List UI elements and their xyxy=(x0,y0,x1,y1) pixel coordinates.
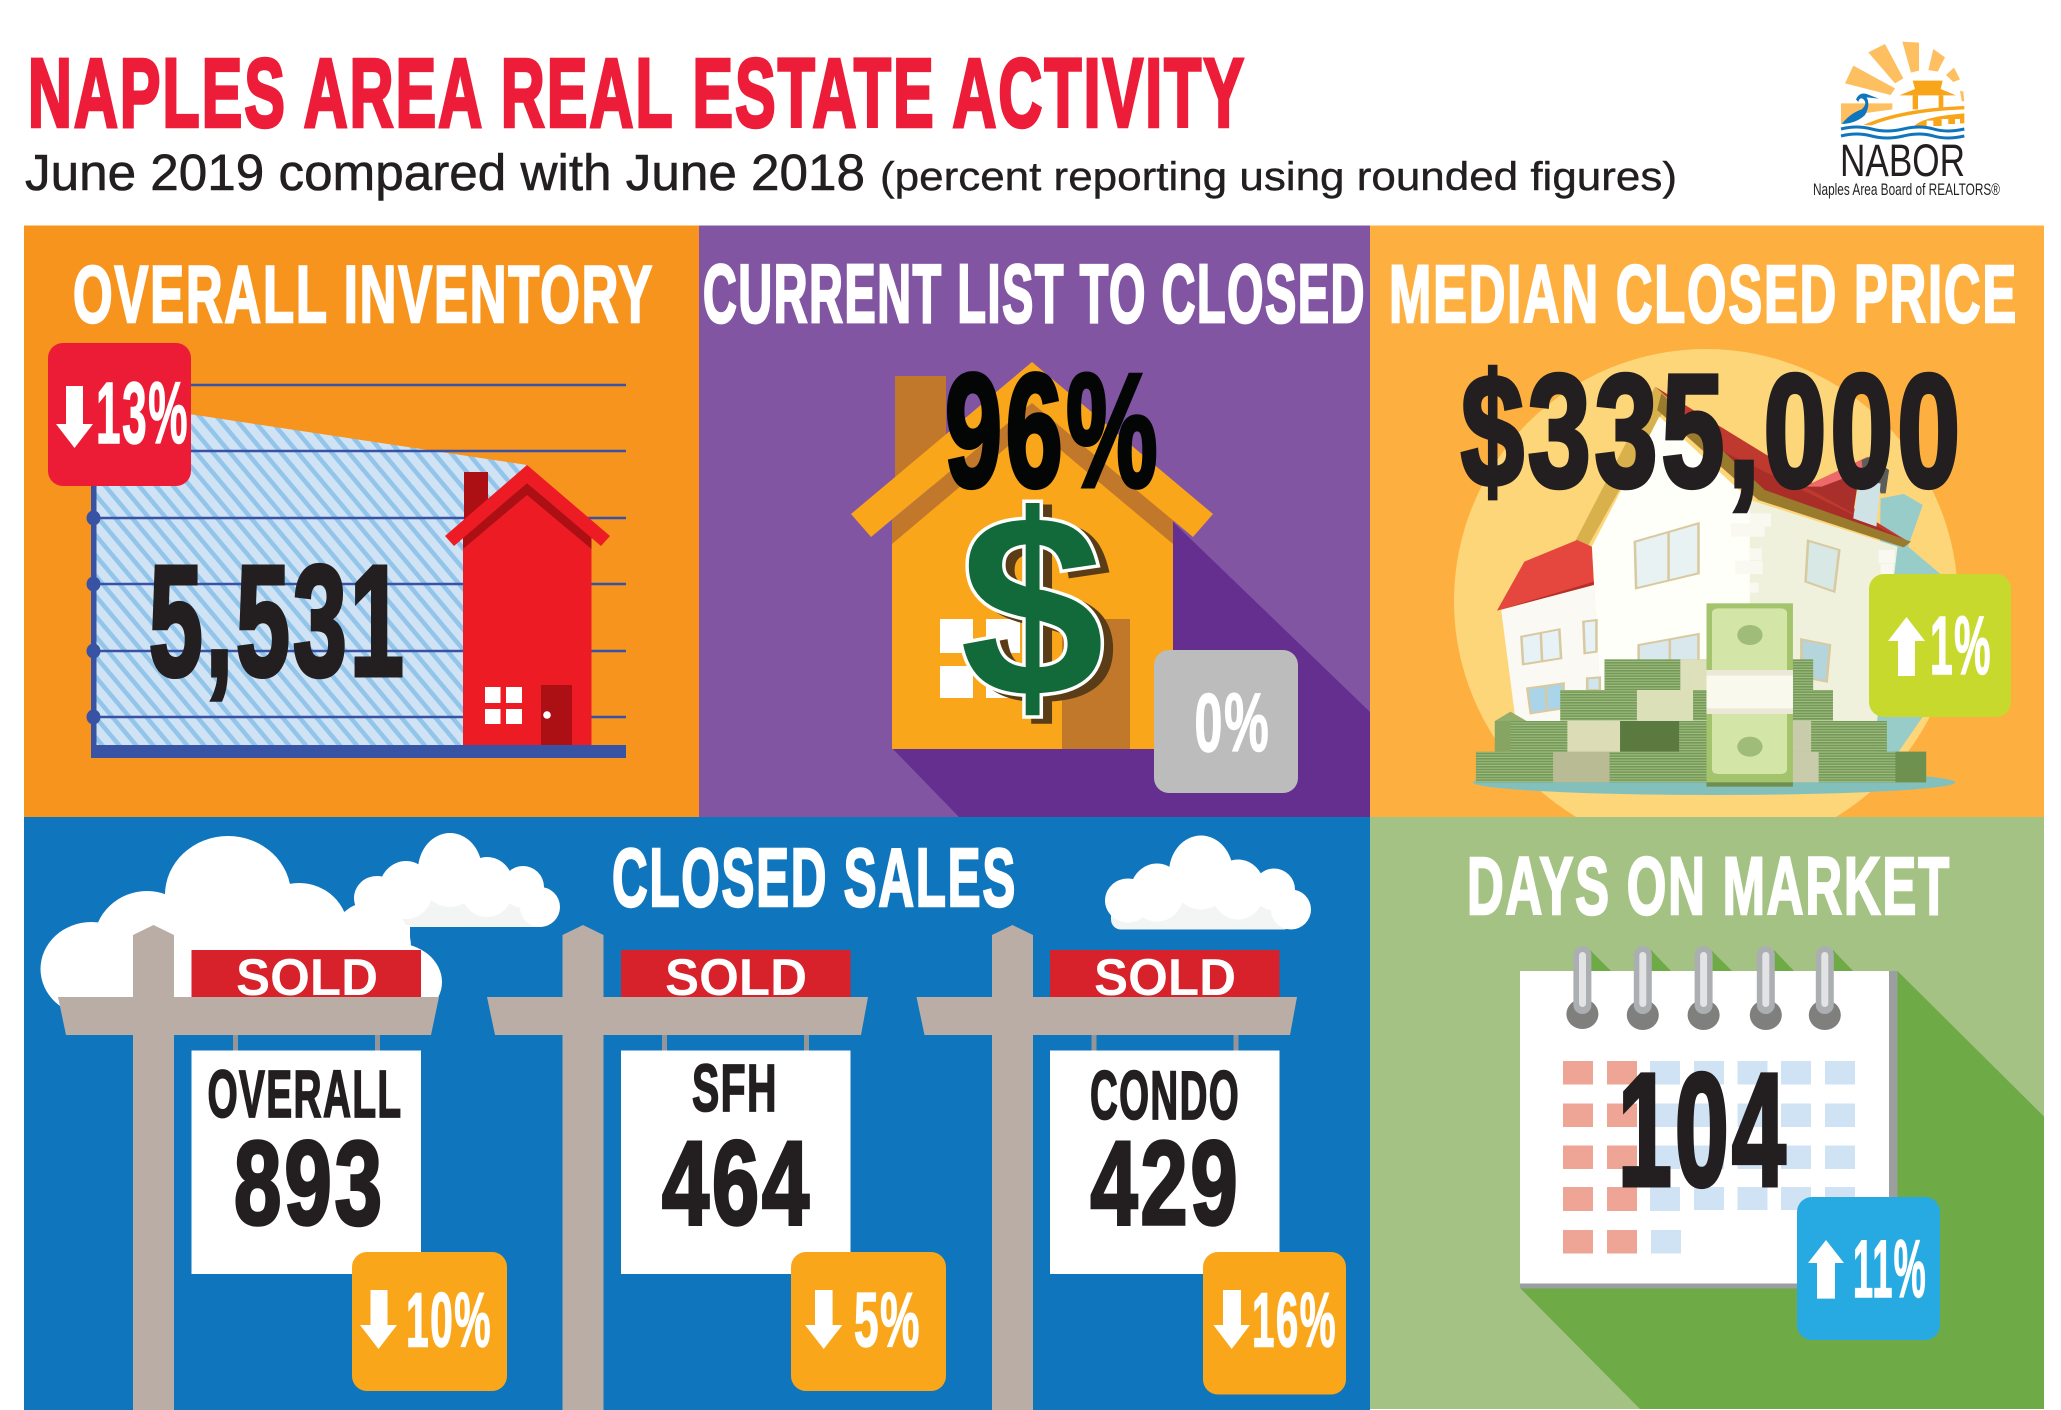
badge: up 1 percent xyxy=(1869,574,2011,717)
subtitle: June 2019 compared with June 2018 xyxy=(25,144,865,201)
badge: down 5 percent: 5% xyxy=(854,1278,921,1364)
panel: overall inventory xyxy=(24,226,699,817)
icon: red house xyxy=(445,465,610,745)
sign: condo: 429 xyxy=(1090,1117,1240,1250)
badge: up 11 percent xyxy=(1797,1197,1940,1340)
sign: SFH: SFH xyxy=(692,1051,778,1126)
panel: closed sales xyxy=(24,817,1370,1410)
badge: down 16 percent xyxy=(1203,1252,1346,1394)
icon: large cloud xyxy=(40,836,442,1021)
illustration: house and stacks of money xyxy=(1473,387,1955,795)
sign: SFH: 464 xyxy=(662,1117,812,1250)
badge: 0 percent xyxy=(1154,650,1298,793)
sign: overall: SOLD xyxy=(236,949,378,1007)
icon: orange house with dollar sign: $ xyxy=(969,467,1113,757)
sign: condo: CONDO xyxy=(1090,1057,1240,1134)
sign: condo xyxy=(916,925,1297,1410)
value: days on market: 104 xyxy=(1618,1040,1789,1219)
heading: closed sales: CLOSED SALES xyxy=(612,831,1017,924)
badge: up 1 percent: 1% xyxy=(1930,599,1992,692)
value: list to closed ratio: 96% xyxy=(945,341,1161,521)
icon: orange house with dollar sign: $ xyxy=(960,462,1104,752)
panel: current list to closed xyxy=(699,226,1370,817)
value: inventory count: 5,531 xyxy=(149,534,407,709)
badge: up 11 percent: 11% xyxy=(1853,1224,1927,1315)
badge: down 5 percent xyxy=(791,1252,946,1391)
sign: overall xyxy=(58,925,439,1410)
sign: overall: 893 xyxy=(234,1117,385,1250)
panel: days on market xyxy=(1370,817,2044,1409)
heading: current list to closed: CURRENT LIST TO CLOSED xyxy=(703,247,1366,340)
icon: small cloud right xyxy=(1105,836,1311,930)
sign: condo: SOLD xyxy=(1094,949,1236,1007)
badge: 0 percent: 0% xyxy=(1194,676,1270,769)
chart: inventory area chart xyxy=(86,385,626,758)
logo: NABOR: NABOR xyxy=(1840,135,1965,186)
panel: median closed price xyxy=(1370,226,2044,853)
sign: SFH xyxy=(487,925,868,1410)
badge: down 13 percent xyxy=(48,343,191,486)
icon: small cloud left xyxy=(354,833,560,927)
title: NAPLES AREA REAL ESTATE ACTIVITY xyxy=(28,38,1246,148)
logo: NABOR xyxy=(1813,42,2000,199)
heading: overall inventory: OVERALL INVENTORY xyxy=(73,250,654,340)
icon: orange house with dollar sign xyxy=(851,362,1370,817)
icon: calendar xyxy=(1520,946,2044,1409)
badge: down 10 percent: 10% xyxy=(406,1278,492,1364)
sign: overall: OVERALL xyxy=(208,1057,402,1132)
sign: SFH: SOLD xyxy=(665,949,807,1007)
badge: down 16 percent: 16% xyxy=(1252,1278,1337,1364)
icon: sun circle xyxy=(1454,349,1958,853)
badge: down 10 percent xyxy=(352,1252,507,1391)
subtitle note: (percent reporting using rounded figures) xyxy=(880,155,1677,199)
badge: down 13 percent: 13% xyxy=(96,365,189,462)
